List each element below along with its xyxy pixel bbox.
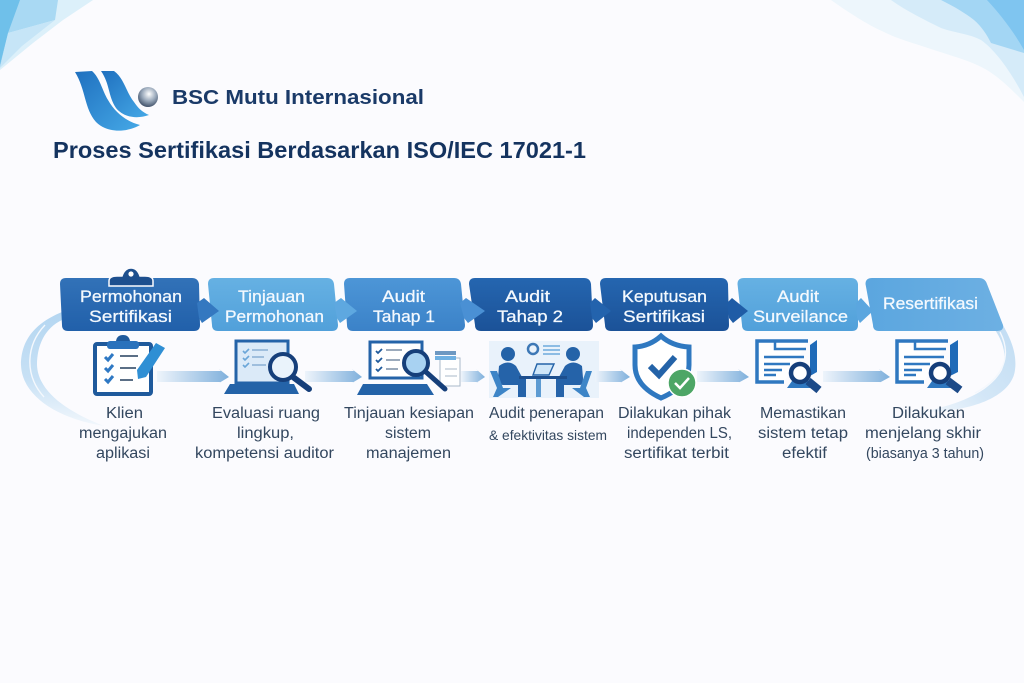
return loop: left [21,312,104,426]
arrow head into step 7 [856,298,873,323]
description 5: Dilakukan pihak [618,405,731,422]
icon: certificate with magnifier [757,340,819,390]
corner decoration: top left [0,0,93,70]
description 4: Audit penerapan [489,405,604,422]
header: Tinjauan Permohonan: Tinjauan [238,288,305,306]
description 5 [618,405,732,462]
icon: laptop with magnifier [224,341,309,394]
arrow head into step 4 [460,298,485,323]
description 1: Klien [106,405,143,422]
icon: laptop, magnifier and documents [357,342,460,395]
return loop: right [922,322,1015,412]
description 4: & efektivitas sistem [489,427,607,443]
step 3 [334,278,485,462]
step 5 [590,278,749,462]
header: Keputusan Sertifikasi [590,278,729,331]
description 7: Dilakukan [892,405,965,422]
description 3: manajemen [366,445,451,462]
description 7: (biasanya 3 tahun) [866,446,984,462]
description 6: efektif [782,445,828,462]
description 3: sistem [385,425,431,442]
icon: audit meeting [489,341,599,398]
connector arrow 6 [823,369,890,383]
description 2: kompetensi auditor [195,445,334,462]
step 6 [727,278,890,462]
connector arrow 3 [461,369,485,383]
description 7: menjelang skhir [865,425,981,442]
header: Audit Tahap 1 [334,278,465,331]
arrow head into step 5 [590,298,611,323]
description 1: aplikasi [96,445,150,462]
header: Audit Tahap 1: Audit [382,288,425,306]
header: Audit Tahap 2: Audit [505,288,550,306]
connector arrow 1 [157,369,229,383]
header: Permohonan Sertifikasi: Permohonan [80,288,182,306]
header: Permohonan Sertifikasi [60,268,200,331]
header: Resertifikasi: Resertifikasi [883,295,978,313]
icon: certificate with magnifier [897,340,960,390]
description 1 [79,405,167,462]
arrow head into step 2 [197,298,219,323]
header: Keputusan Sertifikasi: Keputusan [622,288,707,306]
description 7 [865,405,984,462]
description 5: independen LS, [627,425,732,442]
description 3 [344,405,474,462]
description 3: Tinjauan kesiapan [344,405,474,422]
corner decoration: top right [831,0,1024,102]
header: Audit Surveilance [727,278,858,331]
description 2: lingkup, [237,425,294,442]
header: Audit Surveilance: Surveilance [753,308,848,326]
logo sphere [138,87,158,107]
header: Keputusan Sertifikasi: Sertifikasi [623,308,705,326]
header: Permohonan Sertifikasi: Sertifikasi [89,308,172,326]
step 1 [60,268,229,462]
description 6: sistem tetap [758,425,848,442]
description 1: mengajukan [79,425,167,442]
header: Resertifikasi [856,278,1003,331]
step 2 [195,278,362,462]
header: Tinjauan Permohonan: Permohonan [225,308,324,326]
connector arrow 5 [697,369,749,383]
company name: BSC Mutu Internasional [172,87,424,109]
connector arrow 4 [595,369,630,383]
header: Tinjauan Permohonan [197,278,338,331]
description 5: sertifikat terbit [624,445,730,462]
connector arrow 2 [305,369,362,383]
icon: clipboard with pen [95,335,165,394]
title: Proses Sertifikasi Berdasarkan ISO/IEC 17021-1 [53,137,586,163]
header: Audit Tahap 1: Tahap 1 [373,308,435,326]
description 6 [758,405,848,462]
logo [75,71,158,131]
description 4 [489,405,607,443]
step 4 [460,278,630,443]
arrow head into step 3 [334,298,357,323]
description 2: Evaluasi ruang [212,405,320,422]
arrow head into step 6 [727,298,748,323]
icon: shield with check [635,336,696,398]
logo waves [75,71,149,131]
step 7 [856,278,1003,462]
description 6: Memastikan [760,405,846,422]
header: Audit Tahap 2: Tahap 2 [497,308,563,326]
header: Audit Tahap 2 [460,278,593,331]
header: Audit Surveilance: Audit [777,288,819,306]
description 2 [195,405,334,462]
